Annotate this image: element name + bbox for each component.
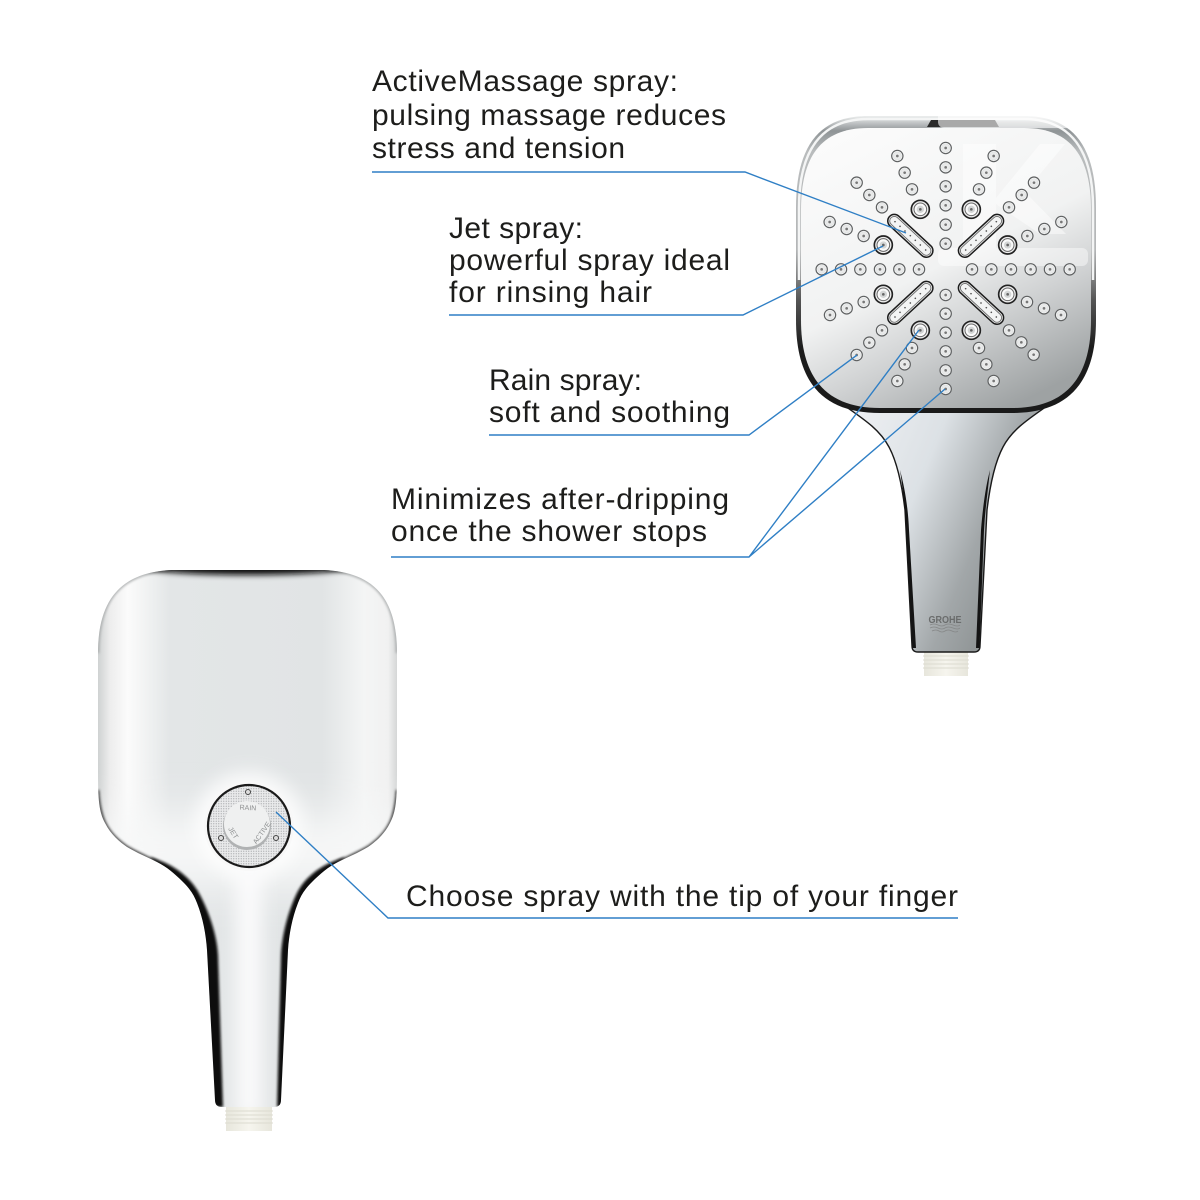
callout: Jet spray: Jet spray: bbox=[449, 212, 583, 245]
callout: Jet spray: powerful spray ideal bbox=[449, 244, 730, 277]
callout: ActiveMassage spray: pulsing massage reduces bbox=[372, 99, 726, 132]
callout: ActiveMassage spray: stress and tension bbox=[372, 132, 625, 165]
callout: ActiveMassage spray: ActiveMassage spray: bbox=[372, 65, 678, 98]
nozzle rays bbox=[816, 142, 1075, 395]
selector labels: JET bbox=[226, 826, 239, 841]
watermark bbox=[938, 111, 1090, 266]
callout: after-dripping: Minimizes after-dripping bbox=[391, 483, 729, 516]
callout: ActiveMassage spray bbox=[372, 65, 726, 165]
connector thread: front bbox=[923, 651, 969, 676]
massage slots bbox=[894, 221, 997, 318]
leader: Rain bbox=[489, 355, 857, 435]
callout: Rain spray: soft and soothing bbox=[489, 396, 730, 429]
callout: after-dripping: once the shower stops bbox=[391, 515, 707, 548]
handle: front bbox=[845, 406, 1047, 652]
callout: Jet spray: for rinsing hair bbox=[449, 276, 652, 309]
leader: selector bbox=[276, 812, 958, 918]
logo: GROHE: GROHE bbox=[928, 615, 962, 626]
spray head rim bbox=[796, 116, 1096, 413]
leader: Jet bbox=[449, 246, 883, 315]
selector button bbox=[204, 781, 294, 871]
shower head: back view bbox=[98, 557, 397, 1131]
leader: ActiveMassage bbox=[372, 172, 906, 233]
top rim highlight bbox=[799, 119, 1093, 280]
jet nozzles bbox=[874, 200, 1017, 339]
logo: GROHE bbox=[928, 615, 962, 632]
selector labels bbox=[226, 805, 273, 846]
leader: after-dripping bbox=[391, 330, 945, 557]
selector labels: ACTIVE bbox=[252, 821, 273, 846]
connector thread: back bbox=[225, 1105, 273, 1131]
back body bbox=[98, 570, 397, 1107]
spray nozzles bbox=[816, 142, 1075, 395]
callout: Rain spray bbox=[489, 364, 730, 429]
callout: Rain spray: Rain spray: bbox=[489, 364, 642, 397]
selector labels: RAIN bbox=[239, 805, 256, 812]
shower head: front view bbox=[796, 111, 1096, 676]
spray head face bbox=[801, 128, 1091, 408]
top tab bbox=[927, 120, 999, 127]
callout: after-dripping bbox=[391, 483, 729, 548]
body shading bbox=[98, 557, 397, 1120]
leader lines bbox=[276, 172, 958, 918]
callout: Jet spray bbox=[449, 212, 730, 309]
callout: selector: Choose spray with the tip of your finger bbox=[406, 880, 958, 913]
